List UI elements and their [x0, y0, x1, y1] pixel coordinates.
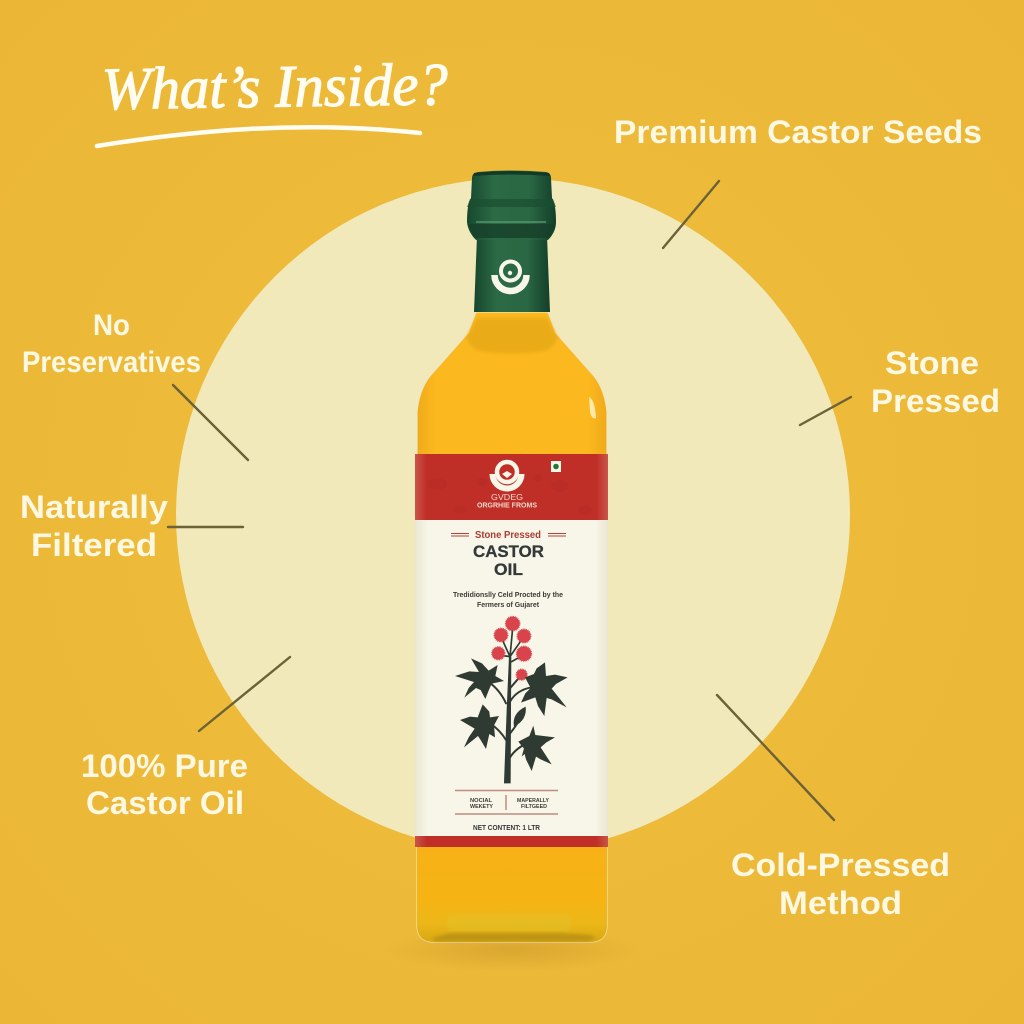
callout: Stone Pressed [800, 345, 1000, 425]
callout: 100% Pure Castor Oil: 100% Pure [81, 748, 248, 784]
label: red top band [415, 454, 608, 520]
label heading: Castor Oil: OIL [494, 560, 523, 579]
callout: Stone Pressed: Stone [885, 345, 979, 381]
cap [467, 170, 556, 240]
label info table: WEKETY [470, 804, 493, 810]
bottle [415, 170, 608, 942]
callout: Naturally Filtered [20, 489, 243, 563]
callout: Cold-Pressed Method: Method [779, 885, 902, 921]
brand name: ORGRHIE FROMS [477, 502, 537, 510]
callout: No Preservatives: Preservatives [22, 346, 201, 379]
brand name: GVDEG [491, 492, 523, 502]
callout: 100% Pure Castor Oil [81, 657, 290, 821]
label heading: Castor Oil [473, 542, 544, 579]
callout: No Preservatives [22, 309, 248, 460]
red band pattern [427, 474, 592, 515]
label info table: MAPERALLY [517, 798, 549, 804]
callout: Cold-Pressed Method: Cold-Pressed [731, 847, 950, 883]
bottle shadow [382, 928, 642, 972]
cream circle [176, 178, 850, 852]
label description: Fermers of Gujaret [477, 600, 540, 609]
callout: Stone Pressed: Pressed [871, 383, 1000, 419]
label logo [492, 462, 522, 488]
net content: NET CONTENT: 1 LTR [473, 823, 541, 832]
label heading: Castor Oil: CASTOR [473, 542, 544, 561]
oil bottom [417, 847, 607, 942]
label heading: Stone Pressed [451, 530, 566, 541]
glass highlight [589, 397, 596, 418]
oil neck shading [466, 318, 558, 354]
bottom pale glass band [447, 915, 571, 931]
glass body with oil [417, 312, 607, 942]
callout: No Preservatives: No [93, 309, 130, 342]
label info table [455, 790, 558, 814]
title: What's Inside?: What’s Inside? [101, 51, 448, 122]
leaves [455, 658, 568, 771]
brand name [477, 492, 537, 510]
label: cream panel [415, 520, 608, 836]
callout: 100% Pure Castor Oil: Castor Oil [86, 785, 244, 821]
label: red bottom band [415, 836, 608, 847]
callout: Naturally Filtered: Filtered [31, 527, 157, 563]
label info table: FILTGEED [521, 804, 547, 810]
callout: Premium Castor Seeds: Premium Castor Seeds [614, 114, 982, 150]
neck logo [494, 262, 526, 291]
castor plant illustration [455, 617, 568, 783]
callout: Premium Castor Seeds [614, 114, 982, 248]
callout: Cold-Pressed Method [717, 695, 950, 921]
callout: Naturally Filtered: Naturally [20, 489, 168, 525]
label heading: Stone Pressed: Stone Pressed [475, 530, 541, 541]
red seed pods [492, 617, 531, 680]
label info table: NOCIAL [470, 798, 492, 804]
neck [474, 236, 550, 312]
bottom glass [432, 933, 596, 941]
label description: Tredidionslly Celd Procted by the [453, 590, 563, 599]
stem and branches [488, 628, 532, 783]
veg mark [551, 461, 561, 472]
cap ring shading [467, 199, 556, 207]
label description [453, 590, 563, 609]
